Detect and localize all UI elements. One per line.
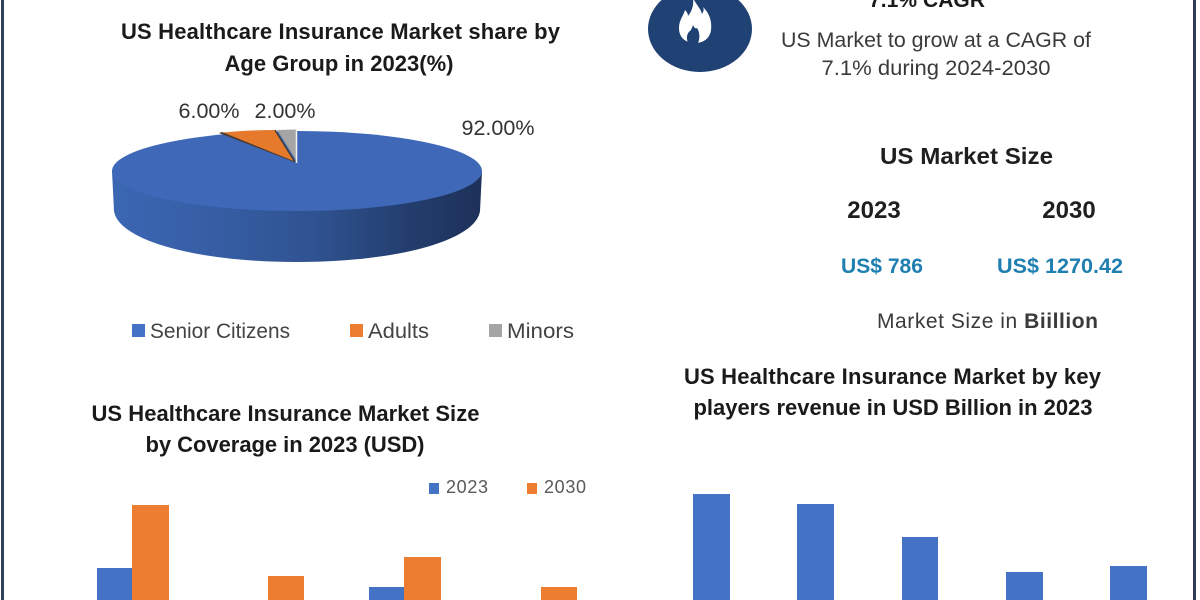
coverage chart title: US Healthcare Insurance Market Size: [92, 401, 480, 426]
coverage chart title: [92, 401, 480, 457]
market size panel: [841, 143, 1123, 333]
coverage legend: 2023: [446, 477, 488, 497]
market values: US$ 786: [841, 255, 923, 278]
years: [847, 197, 1096, 224]
pie chart title: Age Group in 2023(%): [224, 51, 454, 76]
key players chart title: US Healthcare Insurance Market by key: [684, 364, 1102, 389]
pie data labels: [178, 100, 534, 140]
coverage bars: [97, 505, 577, 600]
pie chart title: US Healthcare Insurance Market share by: [121, 19, 561, 44]
market values: US$ 1270.42: [997, 255, 1123, 278]
years: 2030: [1042, 197, 1096, 224]
CAGR description: 7.1% during 2024-2030: [822, 57, 1050, 80]
key players bars: [693, 494, 1147, 600]
pie chart title: [121, 19, 561, 76]
pie legend: Senior Citizens: [150, 320, 290, 343]
coverage legend: 2030: [544, 477, 586, 497]
coverage bar chart panel: [92, 401, 586, 600]
years: 2023: [847, 197, 901, 224]
pie data labels: 6.00%: [178, 100, 240, 123]
market size heading: US Market Size: [880, 143, 1053, 169]
market values: [841, 255, 1123, 278]
market size unit note: Market Size in Biillion: [877, 310, 1098, 333]
pie legend: Minors: [507, 320, 574, 343]
coverage chart title: by Coverage in 2023 (USD): [146, 432, 424, 457]
3D pie chart: [112, 130, 482, 262]
key players chart title: [684, 364, 1102, 420]
pie data labels: 92.00%: [462, 117, 534, 140]
pie legend: [132, 320, 574, 343]
pie chart panel: market share by age group: [112, 19, 574, 343]
key players chart title: players revenue in USD Billion in 2023: [694, 395, 1092, 420]
icon: flame in navy circle: [648, 0, 752, 72]
pie data labels: 2.00%: [254, 100, 316, 123]
CAGR panel: [648, 0, 1091, 80]
key players bar chart panel: [684, 364, 1147, 600]
pie legend: Adults: [368, 320, 429, 343]
CAGR description: US Market to grow at a CAGR of: [781, 29, 1091, 52]
coverage legend: [429, 477, 586, 497]
CAGR description: [781, 29, 1091, 80]
